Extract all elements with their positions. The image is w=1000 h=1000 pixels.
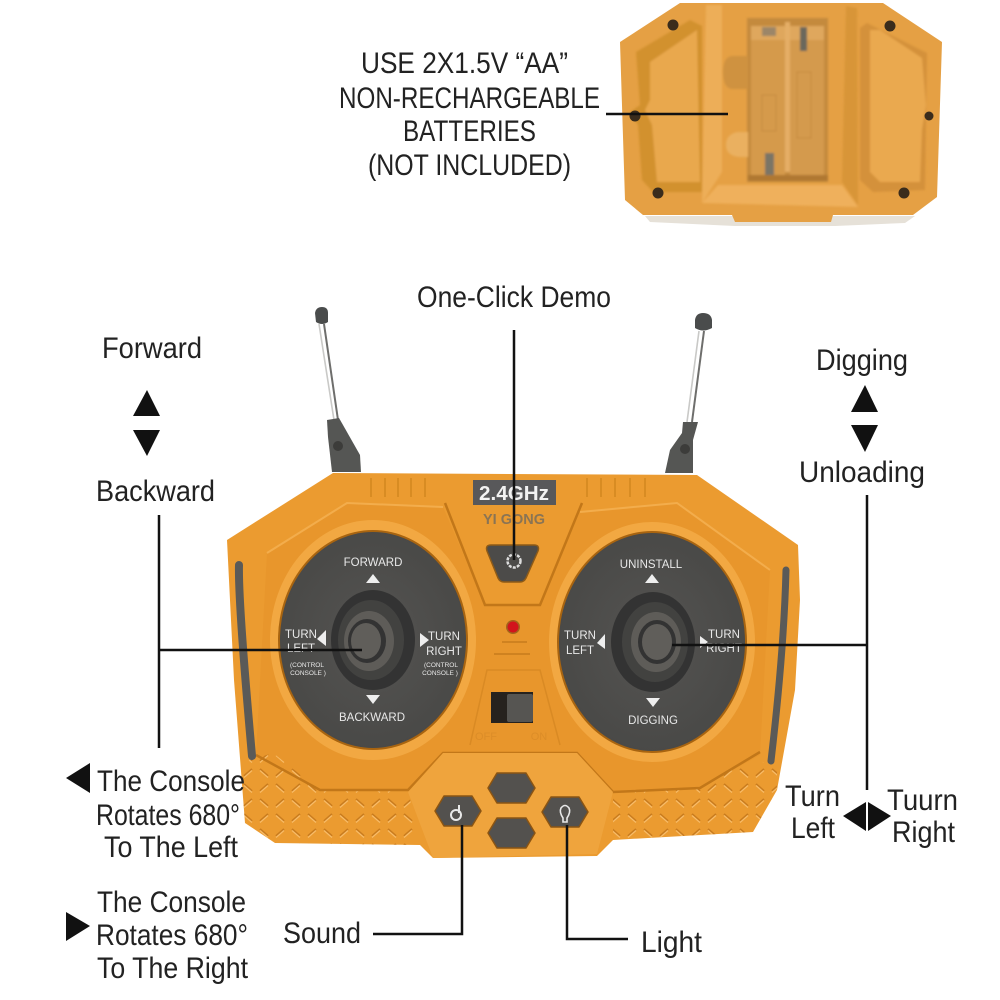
battery callout line <box>606 113 728 115</box>
sound button <box>435 796 481 826</box>
arrow: unloading <box>851 425 878 452</box>
label: turn right <box>887 784 958 849</box>
arrow: turn right <box>868 802 891 831</box>
center bevels <box>702 5 722 203</box>
label: console right: The Console <box>97 886 246 919</box>
case shadow <box>645 216 915 226</box>
right joystick dial: LEFT <box>566 645 594 657</box>
power switch: ON <box>531 731 547 743</box>
arrow: turn left <box>843 802 866 831</box>
demo line <box>513 330 515 560</box>
dial plate <box>559 533 745 751</box>
label: light: Light <box>641 926 703 959</box>
dial labels: FORWARD <box>344 557 402 569</box>
label: turn right: Right <box>892 816 956 849</box>
label: console right: Rotates 680° <box>96 919 248 952</box>
label: digging: Digging <box>816 344 908 377</box>
left joystick dial: (CONTROL <box>424 662 458 669</box>
label: console left <box>96 765 245 864</box>
light button <box>542 797 588 827</box>
tray tabs <box>723 56 748 89</box>
battery callout text: BATTERIES <box>403 115 536 148</box>
power LED <box>506 620 520 634</box>
dial plate <box>280 532 466 748</box>
brand badge: 2.4GHz <box>479 483 549 505</box>
center lower panel <box>470 670 560 745</box>
label: turn left: Left <box>791 812 836 845</box>
left joystick dial <box>270 520 476 760</box>
antenna: left <box>315 307 361 472</box>
left joystick dial: RIGHT <box>426 646 462 658</box>
demo button <box>486 545 538 582</box>
brand badge: YI GONG <box>483 511 545 528</box>
led grooves <box>494 642 530 654</box>
label: forward: Forward <box>102 332 202 365</box>
label: sound: Sound <box>283 917 361 950</box>
grip: left <box>239 565 252 756</box>
icon: sound <box>451 805 461 820</box>
label: console left: The Console <box>97 765 245 798</box>
label: console left: To The Left <box>104 831 239 864</box>
right joystick dial: TURN <box>708 629 740 641</box>
label: turn left: Turn <box>785 780 840 813</box>
arrow: console right <box>66 912 90 941</box>
arrow: forward <box>133 390 160 416</box>
left joystick dial: TURN <box>428 631 460 643</box>
power switch <box>475 692 547 743</box>
icon: gear <box>508 554 520 568</box>
left joystick dial: TURN <box>285 629 317 641</box>
body outline <box>227 473 800 858</box>
battery callout text <box>339 47 600 182</box>
left joystick line <box>159 515 362 748</box>
grip: right <box>771 570 786 761</box>
tread plate: left <box>240 753 420 845</box>
tread plate: right <box>613 757 777 840</box>
left joystick dial: CONSOLE ) <box>290 670 326 677</box>
left joystick dial: CONSOLE ) <box>422 670 458 677</box>
right joystick dial: TURN <box>564 630 596 642</box>
label: console left: Rotates 680° <box>96 799 240 832</box>
arrow: digging <box>851 385 878 412</box>
label: console right: To The Right <box>97 952 249 985</box>
left joystick dial: BACKWARD <box>339 712 405 724</box>
battery callout text: NON-RECHARGEABLE <box>339 82 600 115</box>
center button pad <box>408 753 613 858</box>
icon: bulb <box>560 806 570 822</box>
battery callout text: (NOT INCLUDED) <box>368 149 571 182</box>
label: turn left <box>785 780 840 845</box>
left recess <box>630 20 702 192</box>
controller body <box>227 473 800 858</box>
left joystick dial: LEFT <box>287 643 315 655</box>
joystick <box>331 590 415 690</box>
joystick <box>611 592 695 692</box>
brand badge <box>473 480 556 528</box>
label: backward: Backward <box>96 475 215 508</box>
ridges <box>445 503 582 605</box>
light line <box>567 825 628 939</box>
case body <box>620 3 942 222</box>
label: console right <box>96 886 249 985</box>
right joystick line <box>672 495 867 790</box>
right joystick dial <box>549 522 755 762</box>
right joystick dial: DIGGING <box>628 715 678 727</box>
label: one-click demo: One-Click Demo <box>417 281 611 314</box>
arrow: backward <box>133 430 160 456</box>
right recess <box>860 23 927 192</box>
label: unloading: Unloading <box>799 456 925 489</box>
vertical ribs <box>371 478 645 497</box>
function buttons <box>435 773 588 848</box>
dial labels: UNINSTALL <box>620 559 683 571</box>
face panel <box>256 503 770 792</box>
battery tray <box>747 18 828 182</box>
power switch: OFF <box>475 731 497 743</box>
battery callout text: USE 2X1.5V “AA” <box>361 47 568 80</box>
sound line <box>373 825 462 934</box>
arrow: console left <box>66 763 90 793</box>
screws <box>630 20 934 198</box>
battery compartment photo <box>620 3 942 226</box>
left joystick dial: (CONTROL <box>290 662 324 669</box>
label: turn right: Tuurn <box>887 784 958 817</box>
antenna: right <box>665 313 712 473</box>
right joystick dial: RIGHT <box>706 643 742 655</box>
